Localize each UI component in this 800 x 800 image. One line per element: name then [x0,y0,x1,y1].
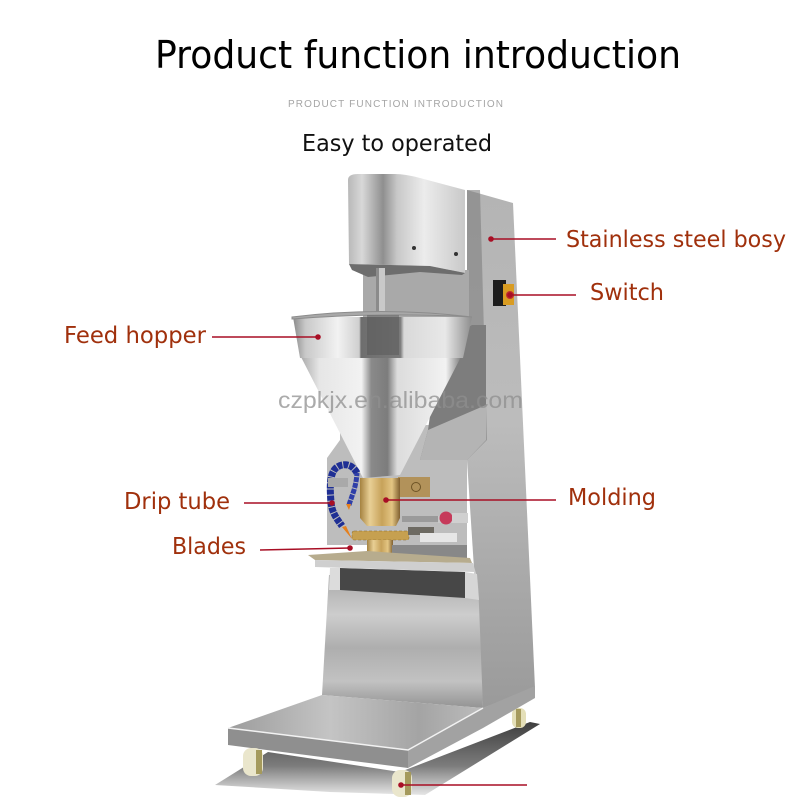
watermark: czpkjx.en.alibaba.com [278,387,523,413]
dark recess [340,568,465,598]
callout: feed hopper [64,323,321,349]
motor housing [348,174,465,273]
column side face [467,190,535,708]
tray [308,551,472,563]
switch [493,280,514,306]
hopper rim [292,312,472,319]
callout: molding [383,485,656,511]
tagline: Easy to operated [302,131,492,157]
callout: switch [507,280,664,306]
base plate top [228,695,483,750]
front right caster [392,770,412,797]
title: Product function introduction [155,33,681,77]
valve [402,512,468,524]
callout: blades: Blades [172,534,246,560]
hopper cone [300,355,462,478]
cutter assembly [392,533,467,559]
floor shadow [215,722,540,795]
callout: molding: Molding [568,485,656,511]
brass gear [352,531,409,540]
upper back panel [363,270,469,340]
orange nozzle [342,526,352,539]
hopper bowl [293,317,472,358]
hose bracket [328,478,348,487]
lower brass column [367,540,393,560]
strut behind hopper [420,325,486,460]
brass clamp [398,477,430,497]
callout: blades [172,534,353,560]
callout: switch: Switch [590,280,664,306]
front left caster [243,748,263,776]
callout: drip tube [124,489,335,515]
subtitle: PRODUCT FUNCTION INTRODUCTION [288,99,503,110]
meatball machine illustration [215,174,540,797]
callout: feed hopper: Feed hopper [64,323,207,349]
brass molding body [360,478,400,526]
shaft [376,268,385,314]
blue coolant hose [330,465,357,526]
rear caster [512,708,526,728]
recessed back panel [327,425,467,545]
rear gear [408,527,434,535]
callout: drip tube: Drip tube [124,489,230,515]
lower front panel [322,575,483,708]
callout: caster (unlabelled) [398,782,527,788]
base plate edges [228,728,408,768]
callout: stainless steel body: Stainless steel bosy [566,227,786,253]
